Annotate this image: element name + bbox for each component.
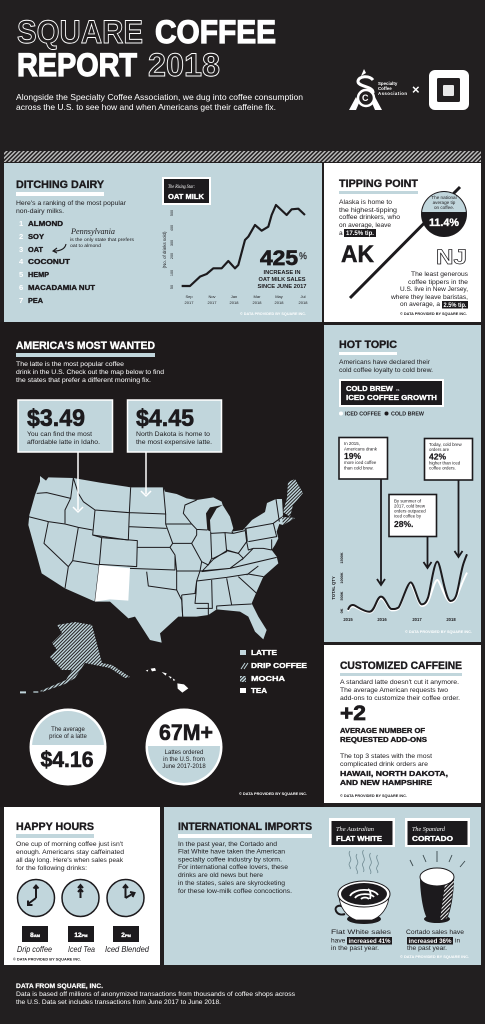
stat: 425 percent: INCREASE IN — [264, 270, 301, 276]
badge: growth chart title: ICED COFFEE GROWTH — [346, 393, 437, 402]
logo: Specialty Coffee Association — [349, 69, 407, 110]
callout: 2015: In 2015, — [344, 441, 360, 446]
intro text: A standard latte doesn't cut it anymore. — [340, 679, 459, 686]
stat circle: lattes ordered: Lattes ordered — [165, 750, 203, 756]
intro text: In the past year, the Cortado and — [178, 841, 277, 848]
stat circle: average latte price: The average — [51, 727, 86, 733]
intro text — [178, 841, 292, 895]
line chart: oat milk sales: Sep — [185, 294, 193, 299]
panel: america's most wanted — [16, 340, 307, 796]
intro text — [16, 92, 303, 112]
note: Pennsylvania: oat to almond — [70, 243, 102, 248]
footer text: DATA FROM SQUARE, INC. — [16, 983, 103, 990]
heading: hot topic: HOT TOPIC — [339, 339, 397, 351]
text: New Jersey: coffee tippers in the — [408, 279, 468, 286]
stat circle: national average tip — [420, 190, 468, 237]
stat circle: lattes ordered — [146, 708, 222, 786]
intro text: add-ons to customize their coffee order. — [340, 695, 460, 702]
line chart: oat milk sales: 2017 — [185, 300, 194, 305]
chart legend: ICED COFFEE — [345, 412, 382, 418]
heading: AMERICA'S MOST WANTED — [16, 340, 155, 352]
callout: summer 2017: orders outpaced — [394, 508, 426, 514]
stat circle: average latte price: $4.16 — [40, 747, 94, 772]
line chart: cold brew vs iced coffee: 1000K — [340, 572, 344, 584]
text: Alaska — [339, 199, 400, 237]
line chart: oat milk sales: 2018 — [230, 300, 239, 305]
pin line — [350, 187, 460, 298]
drink labels: Drip coffee — [17, 944, 52, 954]
state borders — [28, 478, 282, 617]
heading: ditching dairy: DITCHING DAIRY — [16, 179, 105, 191]
text: top states: The top 3 states with the most — [340, 753, 432, 760]
callout: today: coffee orders. — [429, 466, 456, 470]
callout: today: Today, cold brew — [429, 442, 462, 447]
intro text — [16, 841, 124, 872]
text: Alaska: 17.5% tip. — [346, 230, 374, 237]
clock: 12pm — [62, 880, 99, 916]
title: SQUARE — [17, 14, 143, 50]
callout: lowest latte price: affordable latte in Idaho. — [27, 440, 100, 446]
arrow: today callout — [454, 480, 462, 557]
callout: today — [424, 438, 472, 480]
text: top states: HAWAII, NORTH DAKOTA, — [340, 769, 448, 778]
intro text: across the U.S. to see how and when Americans get their caffeine fix. — [16, 102, 276, 112]
map legend: DRIP COFFEE — [251, 661, 307, 670]
intro text: for the following drinks: — [16, 865, 87, 872]
stat: 425 percent — [258, 247, 307, 290]
logo: Specialty Coffee Association: Coffee — [378, 86, 392, 91]
stat: 425 percent: % — [299, 251, 307, 261]
ranked list of milks: HEMP — [28, 270, 49, 279]
icon: flat white cup — [336, 850, 390, 924]
text: flat white: in the past year. — [331, 945, 379, 952]
data credit: © DATA PROVIDED BY SQUARE INC. — [239, 792, 307, 796]
clock: 8am — [18, 880, 54, 916]
line chart: oat milk sales — [162, 205, 308, 305]
note: Pennsylvania: is the only state that prefers — [70, 237, 135, 242]
panel: tipping point — [324, 163, 481, 322]
intro text — [16, 200, 127, 215]
header — [16, 14, 469, 112]
line chart: cold brew vs iced coffee: 500K — [340, 591, 344, 601]
text: cortado: Cortado sales have — [406, 929, 464, 936]
callout: highest latte price: the most expensive latte. — [136, 440, 212, 446]
badge: cortado: CORTADO — [412, 834, 453, 843]
intro text — [16, 361, 164, 384]
callout: summer 2017: 2017, cold brew — [394, 504, 426, 508]
ranked list of milks: PEA — [28, 296, 43, 305]
callout: today: orders are — [429, 447, 450, 452]
line chart: oat milk sales: Jul — [300, 294, 306, 299]
ranked list of milks: MACADAMIA NUT — [28, 283, 95, 292]
intro text: all day long. Here's when sales peak — [16, 857, 124, 864]
panel: happy hours — [4, 807, 160, 965]
hatched divider strip — [4, 151, 481, 162]
line chart: cold brew vs iced coffee: 2015 — [343, 617, 353, 622]
ranked list of milks: ALMOND — [28, 219, 64, 228]
map legend: LATTE — [251, 648, 277, 657]
line chart: oat milk sales: 2018 — [299, 300, 308, 305]
heading: tipping point: TIPPING POINT — [339, 178, 418, 190]
text: Alaska: a — [339, 230, 343, 237]
line chart: cold brew vs iced coffee: TOTAL QTY — [331, 576, 336, 600]
data credit: © DATA PROVIDED BY SQUARE INC. — [400, 955, 469, 959]
text: flat white — [331, 929, 392, 952]
text: flat white: increased 41% — [348, 938, 391, 945]
text: top states — [340, 753, 448, 787]
map legend: MOCHA — [251, 674, 286, 683]
callout: today: 42% — [429, 452, 446, 462]
callout: lowest latte price: $3.49 — [27, 405, 85, 432]
logo: Specialty Coffee Association: Association — [378, 91, 407, 96]
text: New Jersey: 2.5% tip. — [444, 303, 467, 309]
callout: lowest latte price — [18, 400, 112, 452]
line chart: oat milk sales: 300 — [170, 240, 174, 246]
callout: summer 2017 — [389, 494, 436, 536]
text: New Jersey: U.S. live in New Jersey, — [400, 286, 468, 293]
line chart: oat milk sales: 500 — [170, 210, 174, 216]
line chart: oat milk sales: Mar — [254, 294, 261, 299]
text: cortado: the past year. — [407, 945, 447, 952]
callout: 2015: Americans drank — [344, 446, 378, 452]
line chart: oat milk sales: 2018 — [253, 300, 262, 305]
badge: cortado — [405, 818, 470, 847]
line chart: oat milk sales: 2018 — [275, 300, 284, 305]
stat circle: average latte price — [30, 708, 106, 786]
stat label: AVERAGE NUMBER OF — [340, 728, 426, 735]
chart legend — [339, 412, 424, 418]
stat circle: lattes ordered: June 2017-2018 — [162, 764, 206, 770]
text: New Jersey: where they leave baristas, — [390, 294, 468, 301]
stat circle: lattes ordered: in the U.S. from — [163, 757, 205, 763]
badge: growth chart title — [339, 379, 444, 407]
stat circle: national average tip: 11.4% — [429, 217, 459, 229]
callout: highest latte price: $4.45 — [136, 405, 194, 432]
text: New Jersey: on average, a — [400, 301, 440, 308]
stat circle: lattes ordered: 67M+ — [159, 720, 213, 745]
ranked list of milks: OAT — [28, 245, 43, 254]
data credit: © DATA PROVIDED BY SQUARE INC. — [400, 312, 467, 316]
ranked list of milks: 7 — [19, 296, 23, 305]
intro text: Alongside the Specialty Coffee Association, we dug into coffee consumption — [16, 92, 303, 102]
data credit: © DATA PROVIDED BY SQUARE INC. — [240, 312, 306, 316]
title: COFFEE — [155, 14, 276, 50]
line chart: oat milk sales: (No. of drinks sold) — [162, 231, 167, 268]
intro text: specialty coffee industry by storm. — [178, 856, 282, 864]
stat label — [340, 728, 427, 744]
line chart: oat milk sales: Nov — [208, 294, 216, 299]
badge: oat milk — [162, 177, 211, 205]
intro text: for these low-milk coffee concoctions. — [178, 888, 292, 895]
callout: summer 2017: By summer of — [394, 498, 422, 504]
callout: summer 2017: iced coffee by — [394, 514, 422, 518]
text: top states: AND NEW HAMPSHIRE — [340, 778, 432, 787]
heading: HAPPY HOURS — [16, 821, 94, 833]
line chart: oat milk sales: 100 — [170, 270, 174, 276]
badge: growth chart title: COLD BREW — [346, 384, 394, 393]
line chart: cold brew vs iced coffee: 2018 — [446, 617, 456, 622]
panel: hot topic — [324, 325, 481, 642]
panel: ditching dairy — [4, 163, 322, 322]
time badge: 2pm: 2PM — [121, 932, 131, 939]
note: Pennsylvania — [70, 227, 135, 248]
text: flat white: Flat White sales — [331, 929, 392, 936]
arrow to North Dakota — [141, 452, 151, 496]
text: top states: complicated drink orders are — [340, 761, 428, 768]
intro text: The average American requests two — [340, 687, 448, 694]
data credit: © DATA PROVIDED BY SQUARE INC. — [340, 794, 407, 798]
stat label: REQUESTED ADD-ONS — [340, 737, 427, 744]
logo: Square — [429, 70, 469, 110]
stat circle: average latte price: price of a latte — [49, 734, 88, 740]
heading: INTERNATIONAL IMPORTS — [178, 821, 312, 833]
ranked list of milks: 3 — [19, 245, 23, 254]
ranked list of milks: SOY — [28, 232, 44, 241]
line chart: oat milk sales: 50 — [170, 285, 174, 289]
ranked list of milks: 5 — [19, 270, 24, 279]
badge: cortado: The Spaniard — [412, 826, 446, 833]
intro text: The latte is the most popular coffee — [16, 361, 124, 368]
line chart: oat milk sales: 400 — [170, 225, 174, 231]
text: Alaska: Alaska is home to — [339, 199, 392, 206]
time badge: 12pm — [68, 926, 94, 942]
icon: times sign: × — [412, 82, 420, 97]
arrow to oat — [53, 244, 66, 253]
stat circle: national average tip: The national — [431, 195, 457, 200]
intro text: Flat White have taken the American — [178, 848, 285, 856]
intro text: in the states, sales are skyrocketing — [178, 880, 285, 887]
line chart: oat milk sales: 2017 — [208, 300, 217, 305]
intro text — [339, 359, 433, 374]
ranked list of milks: 2 — [19, 232, 23, 241]
ranked list of milks — [19, 219, 95, 305]
New England hatch — [283, 479, 303, 517]
title — [17, 14, 276, 83]
time badge: 12pm: 12PM — [74, 932, 88, 939]
callout: 2015: than cold brew. — [344, 466, 374, 470]
map legend: TEA — [251, 686, 268, 695]
callout: today: higher than iced — [429, 460, 461, 466]
badge: flat white: The Australian — [336, 826, 374, 833]
text: flat white: have — [331, 938, 346, 944]
ranked list of milks: 4 — [19, 257, 24, 266]
chart legend: COLD BREW — [391, 412, 424, 418]
badge: flat white — [329, 818, 395, 847]
callout: summer 2017: 28%. — [394, 519, 413, 529]
ranked list of milks: 1 — [19, 219, 24, 228]
map: United States — [20, 476, 303, 693]
intro text: Americans have declared their — [339, 359, 431, 366]
heading: CUSTOMIZED CAFFEINE — [340, 660, 462, 672]
intro text: enough. Americans stay caffeinated — [16, 849, 124, 856]
panel: customized caffeine — [324, 645, 481, 803]
intro text: cold coffee loyalty to cold brew. — [339, 367, 433, 374]
footer text: the U.S. Data set includes transactions from June 2017 to June 2018. — [16, 999, 221, 1006]
text: New Jersey: The least generous — [411, 271, 469, 278]
text: cortado — [406, 929, 464, 952]
time badge: 2pm — [113, 926, 139, 942]
callout: highest latte price: North Dakota is home to — [136, 432, 211, 438]
intro text: drink in the U.S. Check out the map below to find — [16, 369, 164, 376]
ranked list of milks: 6 — [19, 283, 23, 292]
stat: 425 percent: 425 — [260, 247, 298, 270]
icon: cortado glass — [410, 851, 465, 923]
stat circle: national average tip: average tip — [433, 200, 456, 205]
intro text: One cup of morning coffee just isn't — [16, 841, 123, 848]
panel: international imports — [164, 807, 481, 965]
intro text: the states that prefer a different morning fix. — [16, 377, 151, 384]
state label: NJ: NJ — [436, 246, 467, 269]
line chart: cold brew vs iced coffee — [331, 552, 467, 622]
states fill — [28, 476, 295, 643]
footer text: Data is based off millions of anonymized transactions from thousands of coffee shops across — [16, 991, 295, 998]
callout: highest latte price — [128, 400, 222, 452]
Alaska — [40, 622, 130, 692]
title: REPORT — [17, 47, 137, 83]
New Mexico — [95, 565, 130, 602]
callout: lowest latte price: You can find the most — [27, 432, 92, 438]
callout: 2015 — [339, 438, 388, 479]
text: Alaska: coffee drinkers, who — [339, 214, 400, 221]
text: cortado: in — [455, 938, 460, 944]
stat: 425 percent: OAT MILK SALES — [258, 277, 306, 283]
badge: oat milk: OAT MILK — [168, 192, 205, 201]
line chart: oat milk sales: Jan — [231, 294, 237, 299]
logo: Specialty Coffee Association: Specialty — [378, 81, 398, 86]
footer text — [16, 983, 295, 1006]
data credit: © DATA PROVIDED BY SQUARE INC. — [13, 958, 81, 962]
callout: 2015: more iced coffee — [344, 460, 377, 465]
note: Pennsylvania: Pennsylvania — [70, 227, 115, 236]
intro text — [340, 679, 460, 702]
intro text: Here's a ranking of the most popular — [16, 200, 127, 207]
stat: plus two: +2 — [340, 702, 366, 725]
drink labels: Iced Tea — [68, 944, 95, 954]
line chart: cold brew vs iced coffee: 2017 — [412, 617, 422, 622]
text: Alaska: on average, leave — [339, 222, 391, 229]
map legend — [240, 648, 307, 695]
intro text: For international coffee lovers, these — [178, 864, 288, 871]
Hawaii — [146, 668, 188, 693]
arrow: 2015 callout — [377, 479, 385, 585]
stat: 425 percent: SINCE JUNE 2017 — [258, 284, 307, 290]
drink labels: Iced Blended — [105, 944, 149, 954]
stat circle: national average tip: on coffee. — [434, 205, 454, 210]
text: New Jersey — [390, 271, 469, 309]
intro text: drinks are old news but here — [178, 872, 263, 879]
line chart: oat milk sales: 200 — [170, 253, 174, 259]
state label: AK: AK — [341, 241, 375, 268]
badge: flat white: FLAT WHITE — [336, 834, 382, 843]
line chart: cold brew vs iced coffee: 0K — [340, 608, 344, 613]
badge: growth chart title: vs. — [396, 387, 400, 392]
line chart: cold brew vs iced coffee: 2016 — [377, 617, 387, 622]
drink labels — [17, 944, 149, 954]
clock: 2pm — [107, 880, 144, 916]
arrow: 2017 callout — [424, 537, 432, 568]
time badge: 8am — [22, 926, 48, 942]
intro text: non-dairy milks. — [16, 208, 64, 215]
data credit: © DATA PROVIDED BY SQUARE INC. — [405, 630, 472, 634]
callout: 2015: 19% — [344, 451, 361, 461]
time badge: 8am: 8AM — [30, 932, 41, 939]
line chart: oat milk sales: May — [275, 294, 283, 299]
title: 2018 — [148, 47, 220, 83]
text: cortado: increased 36% — [408, 938, 452, 945]
arrow to Idaho — [73, 452, 83, 512]
text: Alaska: the highest-tipping — [339, 207, 397, 214]
badge: oat milk: The Rising Star: — [168, 184, 195, 190]
ranked list of milks: COCONUT — [28, 257, 70, 266]
logo: Specialty Coffee Association: C — [362, 93, 369, 103]
line chart: cold brew vs iced coffee: 1500K — [340, 552, 344, 564]
